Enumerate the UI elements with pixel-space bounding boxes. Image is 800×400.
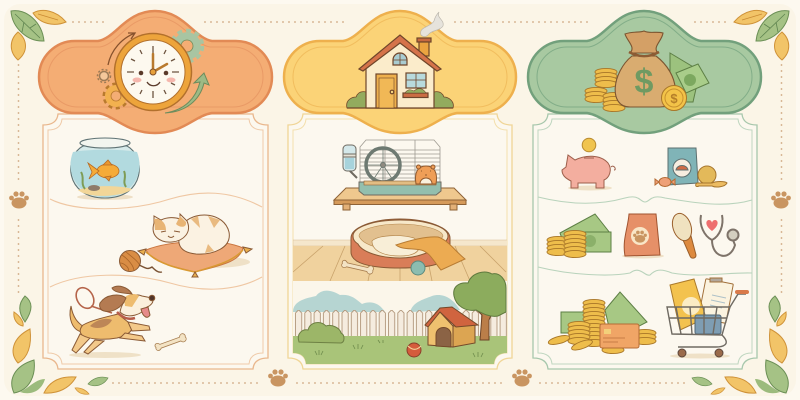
corner leaves: top right	[734, 10, 789, 60]
illustration: bone on floor	[341, 259, 374, 275]
illustration: fish bowl	[70, 138, 140, 200]
icon: banknotes	[670, 53, 709, 102]
cage bars	[360, 140, 440, 182]
cage tray	[359, 182, 441, 195]
grass tufts	[315, 340, 483, 357]
illustration: grooming brush	[669, 211, 696, 258]
icon: chimney smoke	[421, 12, 443, 36]
illustration: ball and scoop	[696, 166, 727, 187]
badge: time (orange)	[39, 11, 272, 133]
illustration: bone	[154, 333, 187, 352]
yarn ball	[120, 250, 162, 272]
corner leaves: top left	[11, 10, 66, 60]
hamster wheel	[366, 148, 400, 182]
icon: green gear	[172, 30, 202, 62]
credit card	[600, 324, 639, 348]
icon: gold coin: $	[670, 91, 678, 106]
room scene clipped to middle panel	[293, 240, 508, 366]
blanket	[396, 237, 465, 270]
dividers: left column	[50, 193, 262, 289]
illustration: running dog with leash	[69, 284, 155, 358]
shelf	[334, 188, 466, 210]
illustration: pet bed	[351, 219, 465, 270]
water bottle	[343, 145, 357, 178]
illustration: paw food bag	[622, 214, 664, 258]
illustration: teal ball	[411, 261, 425, 275]
icon: house	[347, 35, 453, 108]
icon: gold coin	[662, 86, 686, 110]
illustration: hamster cage on shelf	[334, 140, 466, 210]
badge: home (yellow)	[284, 11, 516, 133]
icon: small gear	[98, 70, 110, 82]
corner leaves: bottom right	[692, 296, 788, 394]
illustration: dog house	[425, 307, 478, 347]
badge: money (green)	[528, 11, 761, 133]
floor and wall	[293, 240, 508, 281]
illustration: stethoscope	[701, 215, 738, 256]
dollar sign: $	[635, 63, 654, 101]
illustration: tree	[454, 272, 506, 340]
yard background	[293, 281, 508, 366]
icon: money bag	[615, 31, 675, 107]
panel: middle column frame	[288, 114, 512, 369]
illustration: red ball	[407, 343, 421, 357]
panel: left column frame	[43, 114, 268, 369]
yellow food bag	[670, 279, 706, 330]
dividers: right column	[538, 197, 752, 275]
goldfish	[88, 160, 119, 181]
illustration: shopping cart	[667, 278, 747, 358]
illustration: cash and coins	[547, 214, 611, 258]
illustration: bush	[298, 323, 344, 343]
paw prints	[9, 191, 791, 386]
corner leaves: bottom left	[12, 296, 108, 394]
arrow: dark arc	[108, 33, 135, 65]
panel: right column frame	[533, 114, 757, 369]
arrow: green upward	[165, 73, 209, 113]
illustration: money pile with card	[547, 292, 656, 354]
clipboard	[698, 278, 733, 323]
illustration: piggy bank	[562, 138, 615, 190]
illustration: pet food bag blue	[668, 148, 698, 185]
cart frame	[667, 294, 746, 347]
crate	[695, 315, 721, 334]
illustration: sleeping cat on cushion	[120, 214, 252, 277]
icon: orange gear	[104, 84, 128, 108]
hamster	[415, 165, 437, 184]
icon: clock	[114, 34, 192, 110]
illustration: candy treat	[655, 178, 675, 186]
icon: coin stacks	[585, 68, 625, 112]
